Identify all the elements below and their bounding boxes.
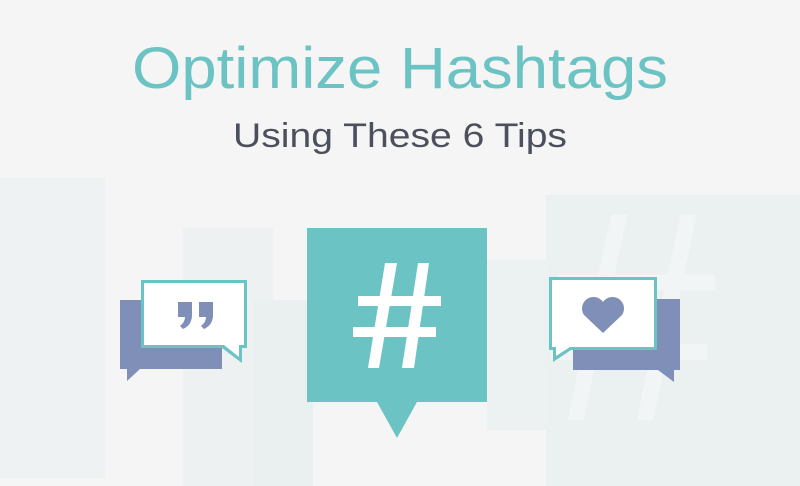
background decorative hash blocks: #	[545, 148, 718, 484]
subtitle: Using These 6 Tips	[233, 117, 567, 155]
title: Optimize Hashtags	[132, 36, 668, 101]
hashtag symbol	[353, 263, 441, 368]
icon: quote speech bubble	[120, 280, 247, 381]
icon: central hashtag bubble	[307, 228, 487, 438]
background decorative hash blocks	[0, 148, 800, 486]
icon: heart speech bubble	[549, 277, 680, 382]
